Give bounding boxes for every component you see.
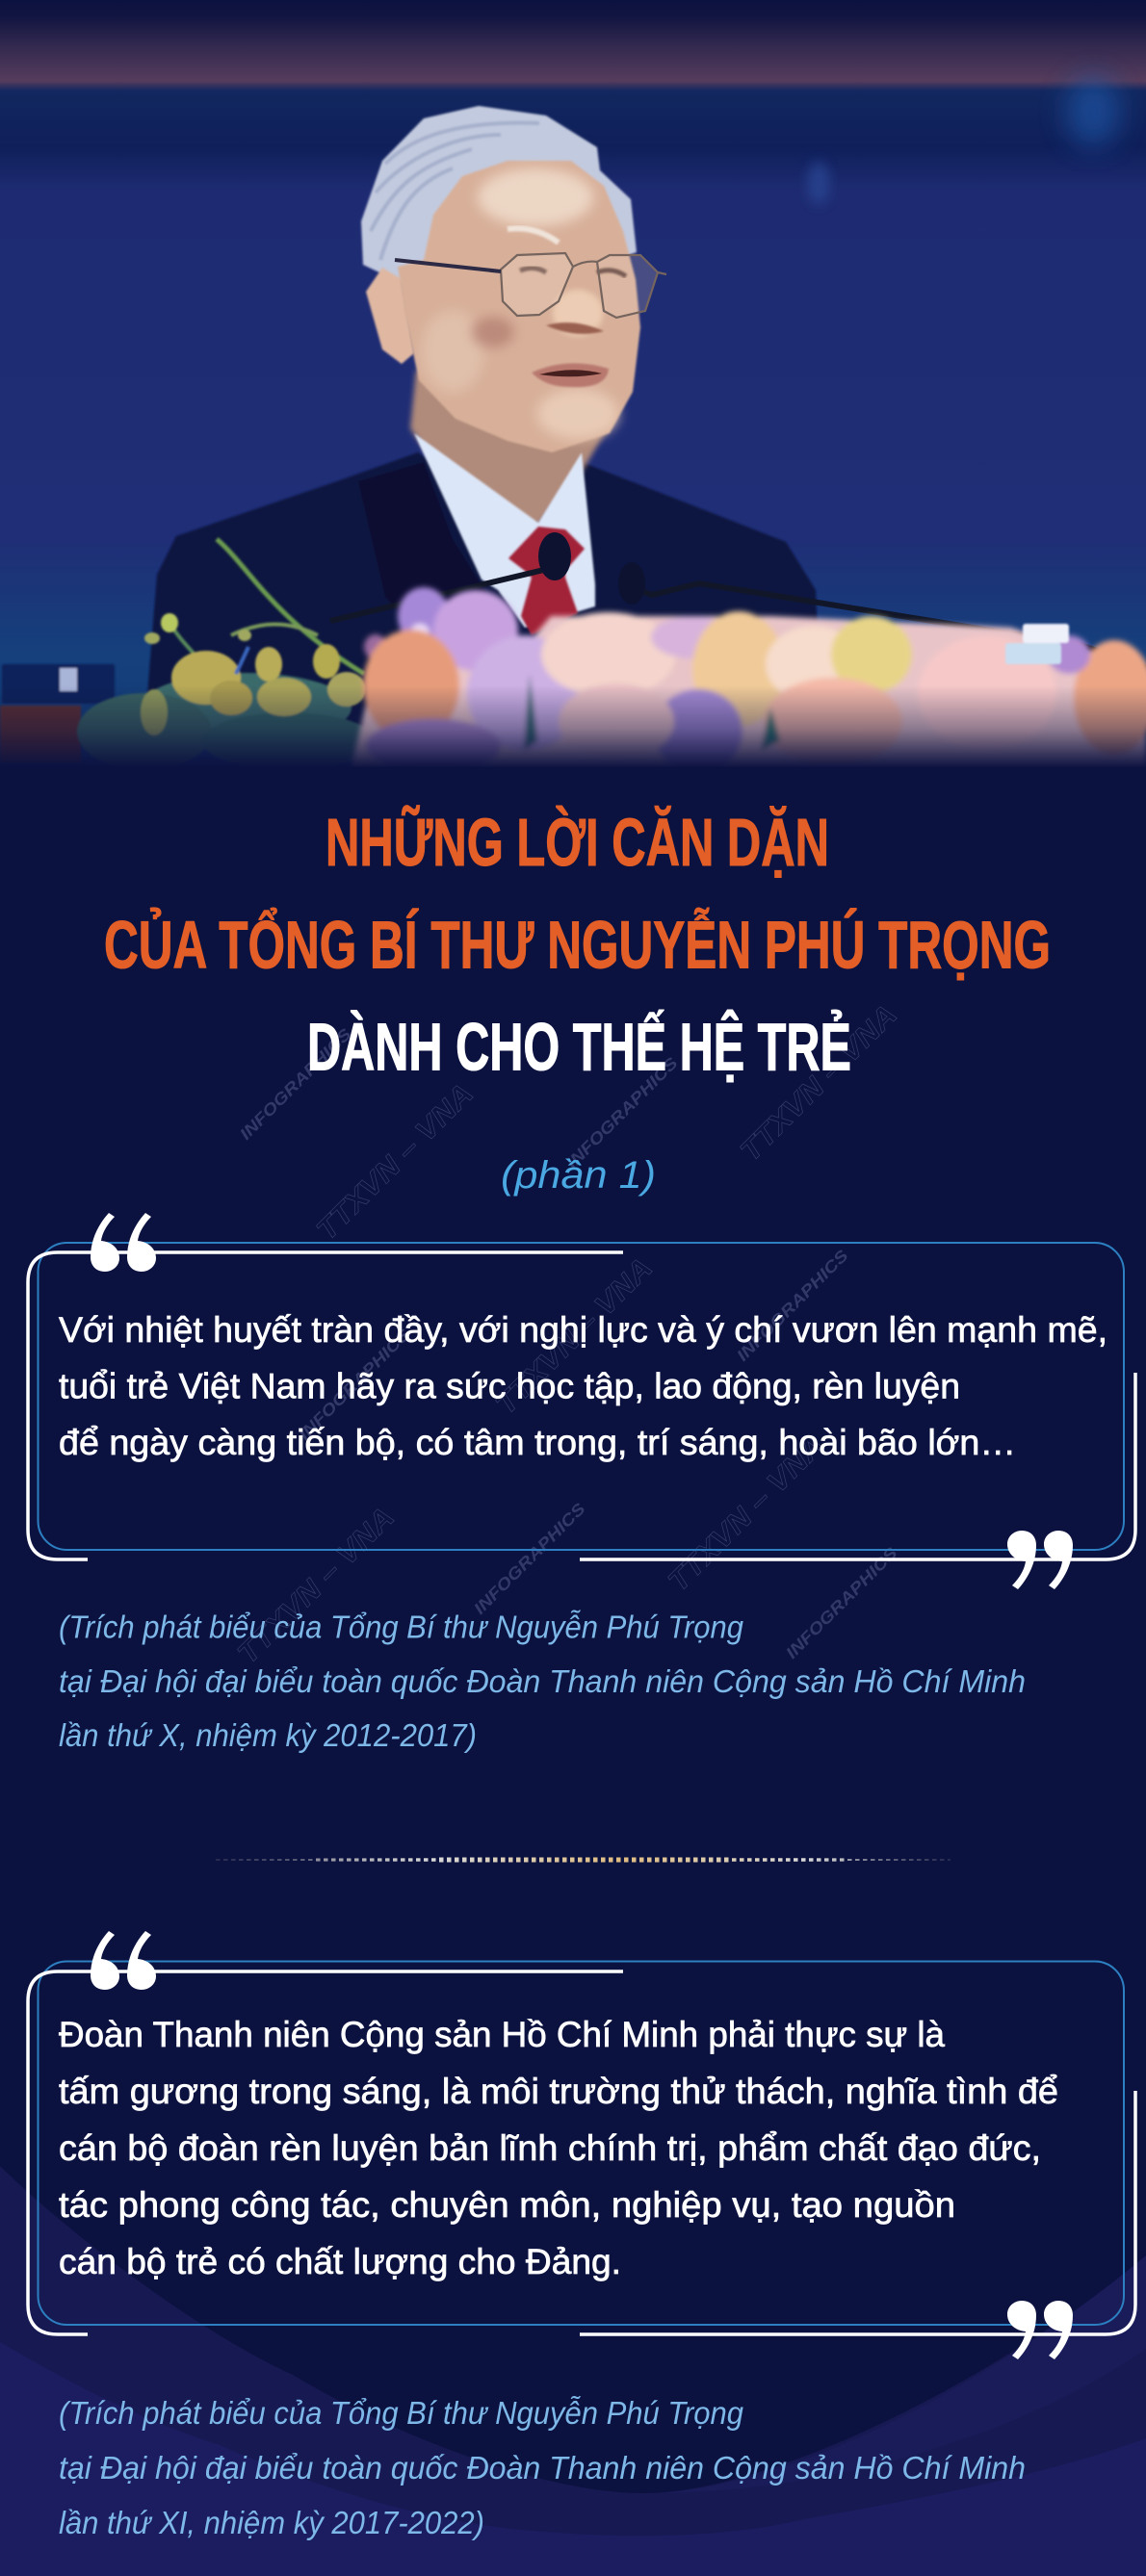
flowers: [351, 587, 1146, 774]
face: [398, 161, 640, 452]
quote text: Đoàn Thanh niên Cộng sản Hồ Chí Minh phải thực sự là: [59, 2015, 945, 2054]
watermarks: TTXVN – VNA: [663, 1430, 831, 1598]
photo: speaker at podium: [0, 0, 1146, 774]
quote text: cán bộ đoàn rèn luyện bản lĩnh chính trị, phẩm chất đạo đức,: [59, 2128, 1041, 2168]
citation 1: lần thứ X, nhiệm kỳ 2012-2017): [59, 1717, 477, 1753]
quote text: [59, 1310, 1107, 1462]
citation 2: lần thứ XI, nhiệm kỳ 2017-2022): [59, 2505, 484, 2540]
panel: quote 2: [28, 1931, 1135, 2359]
title: DÀNH CHO THẾ HỆ TRẺ: [307, 1009, 851, 1084]
paper on podium: [1005, 624, 1069, 664]
icon: closing quote: [1007, 1531, 1073, 1589]
quote text: Với nhiệt huyết tràn đầy, với nghị lực và ý chí vươn lên mạnh mẽ,: [59, 1310, 1107, 1350]
citation 1: [59, 1610, 1026, 1753]
mouth: [532, 363, 609, 387]
microphones: [330, 532, 1146, 668]
head: [361, 106, 666, 452]
foliage: [77, 539, 376, 770]
panel: quote 1: [28, 1213, 1135, 1589]
citation 1: tại Đại hội đại biểu toàn quốc Đoàn Thanh niên Cộng sản Hồ Chí Minh: [59, 1663, 1026, 1699]
quote text: tuổi trẻ Việt Nam hãy ra sức học tập, lao động, rèn luyện: [59, 1367, 960, 1405]
citation 2: tại Đại hội đại biểu toàn quốc Đoàn Thanh niên Cộng sản Hồ Chí Minh: [59, 2450, 1026, 2486]
title: NHỮNG LỜI CĂN DẶN: [326, 805, 829, 880]
blue frame: [39, 1962, 1124, 2325]
title: [104, 805, 1051, 1084]
quote text: tấm gương trong sáng, là môi trường thử thách, nghĩa tình để: [59, 2072, 1058, 2111]
icon: opening quote: [91, 1213, 156, 1272]
white bracket: [28, 1971, 1135, 2334]
watermarks: INFOGRAPHICS: [236, 1024, 355, 1144]
watermarks: [232, 999, 903, 1670]
watermarks: TTXVN – VNA: [232, 1502, 401, 1670]
icon: opening quote: [91, 1931, 156, 1990]
watermarks: INFOGRAPHICS: [782, 1543, 901, 1662]
left podium: [0, 664, 115, 763]
watermarks: INFOGRAPHICS: [470, 1499, 589, 1618]
quote text: để ngày càng tiến bộ, có tâm trong, trí sáng, hoài bão lớn…: [59, 1423, 1016, 1462]
hair: [361, 106, 637, 289]
watermarks: INFOGRAPHICS: [733, 1246, 852, 1365]
shirt: [414, 433, 595, 628]
citation 2: [59, 2395, 1026, 2540]
white bracket: [28, 1252, 1135, 1559]
citation 1: (Trích phát biểu của Tổng Bí thư Nguyễn Phú Trọng: [59, 1610, 744, 1644]
subtitle: (phần 1): [501, 1154, 656, 1197]
watermarks: TTXVN – VNA: [311, 1078, 480, 1247]
suit jacket: [146, 452, 819, 741]
blue frame: [39, 1243, 1124, 1550]
photo fade: [0, 685, 1146, 772]
bottom background swooshes: [0, 2118, 1146, 2576]
quote text: cán bộ trẻ có chất lượng cho Đảng.: [59, 2242, 621, 2281]
quote text: tác phong công tác, chuyên môn, nghiệp vụ, tạo nguồn: [59, 2185, 955, 2225]
watermarks: TTXVN – VNA: [490, 1252, 659, 1421]
watermarks: INFOGRAPHICS: [295, 1325, 414, 1444]
watermarks: TTXVN – VNA: [735, 999, 903, 1168]
citation 2: (Trích phát biểu của Tổng Bí thư Nguyễn Phú Trọng: [59, 2395, 744, 2431]
photo background: stage: [0, 0, 1146, 770]
neck: [410, 371, 616, 527]
quote text: [59, 2015, 1058, 2281]
necktie: [508, 527, 585, 635]
ear: [366, 268, 414, 364]
watermarks: INFOGRAPHICS: [562, 1053, 682, 1172]
glasses: [395, 253, 666, 318]
icon: closing quote: [1007, 2301, 1073, 2359]
